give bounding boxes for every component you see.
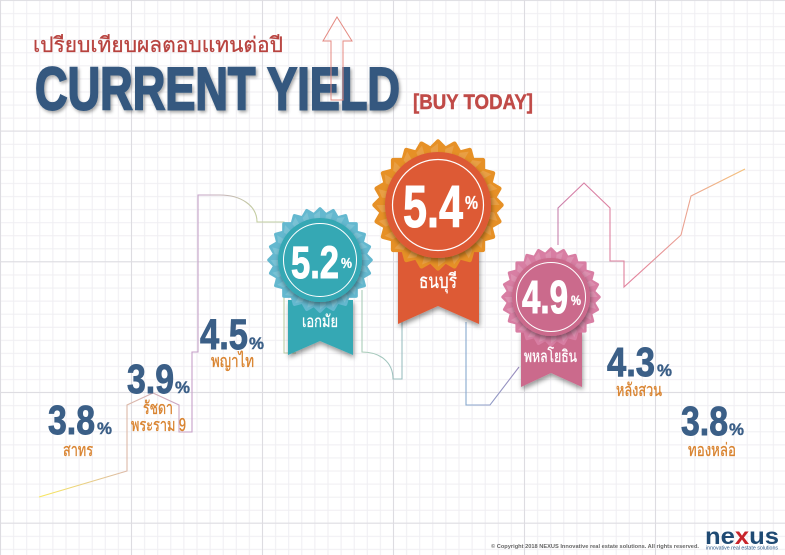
badge: Phahon Yothin 4.9% (503, 249, 599, 387)
badge: Ekkamai 5.2%: 5.2 (291, 237, 339, 288)
stat: Thong Lo 3.8%: % (729, 420, 744, 439)
stat: Lang Suan 4.3%: หลังสวน (616, 380, 662, 400)
stat: Phaya Thai 4.5%: % (249, 334, 264, 353)
subtitle: Thai heading: เปรียบเทียบผลตอบแทนต่อปี (33, 34, 283, 57)
badge: Phahon Yothin 4.9%: 4.9 (522, 271, 568, 323)
stat: Lang Suan 4.3%: % (657, 361, 672, 380)
rising route line (39, 169, 745, 497)
badge: Ekkamai 5.2%: % (341, 255, 352, 272)
logo: nexus: innovative real estate solutions (706, 546, 779, 552)
icon: rising arrow outline (323, 17, 352, 100)
stat: Thong Lo 3.8%: 3.8 (681, 398, 728, 444)
stat: Thong Lo 3.8%: ทองหล่อ (688, 440, 736, 460)
stat: Sathorn 3.8%: 3.8 (48, 397, 95, 443)
stat: Lang Suan 4.3%: 4.3 (607, 339, 655, 385)
stat: Ratchada Rama 9 3.9%: % (175, 378, 190, 397)
copyright: © Copyright 2018 NEXUS Innovative real estate solutions. All rights reserved. (491, 543, 699, 550)
stat: Ratchada Rama 9 3.9%: รัชดา (143, 398, 173, 418)
stat: Sathorn 3.8% (48, 397, 112, 460)
badge: Thonburi 5.4%: 5.4 (403, 174, 463, 240)
stat: Phaya Thai 4.5%: 4.5 (200, 311, 248, 359)
stat: Ratchada Rama 9 3.9%: พระราม 9 (131, 415, 186, 435)
badge: Thonburi 5.4%: ธนบุรี (419, 271, 457, 294)
stat: Lang Suan 4.3% (607, 339, 672, 400)
badge: Phahon Yothin 4.9%: % (571, 292, 581, 308)
stat: Sathorn 3.8%: สาทร (63, 440, 93, 460)
tag: buy today: [BUY TODAY] (413, 91, 533, 114)
badge: Phahon Yothin 4.9%: พหลโยธิน (524, 346, 577, 366)
badge: Thonburi 5.4% (375, 142, 501, 324)
stat: Ratchada Rama 9 3.9% (127, 356, 190, 435)
logo: nexus: nexus (705, 523, 779, 549)
badge: Ekkamai 5.2% (269, 209, 371, 355)
stat: Sathorn 3.8%: % (97, 419, 112, 438)
stat: Thong Lo 3.8% (681, 398, 744, 460)
badge: Thonburi 5.4%: % (465, 193, 478, 213)
stat: Phaya Thai 4.5%: พญาไท (211, 350, 254, 371)
badge: Ekkamai 5.2%: เอกมัย (302, 312, 338, 331)
title: CURRENT YIELD: CURRENT YIELD (35, 56, 400, 122)
stat: Ratchada Rama 9 3.9%: 3.9 (127, 356, 174, 402)
